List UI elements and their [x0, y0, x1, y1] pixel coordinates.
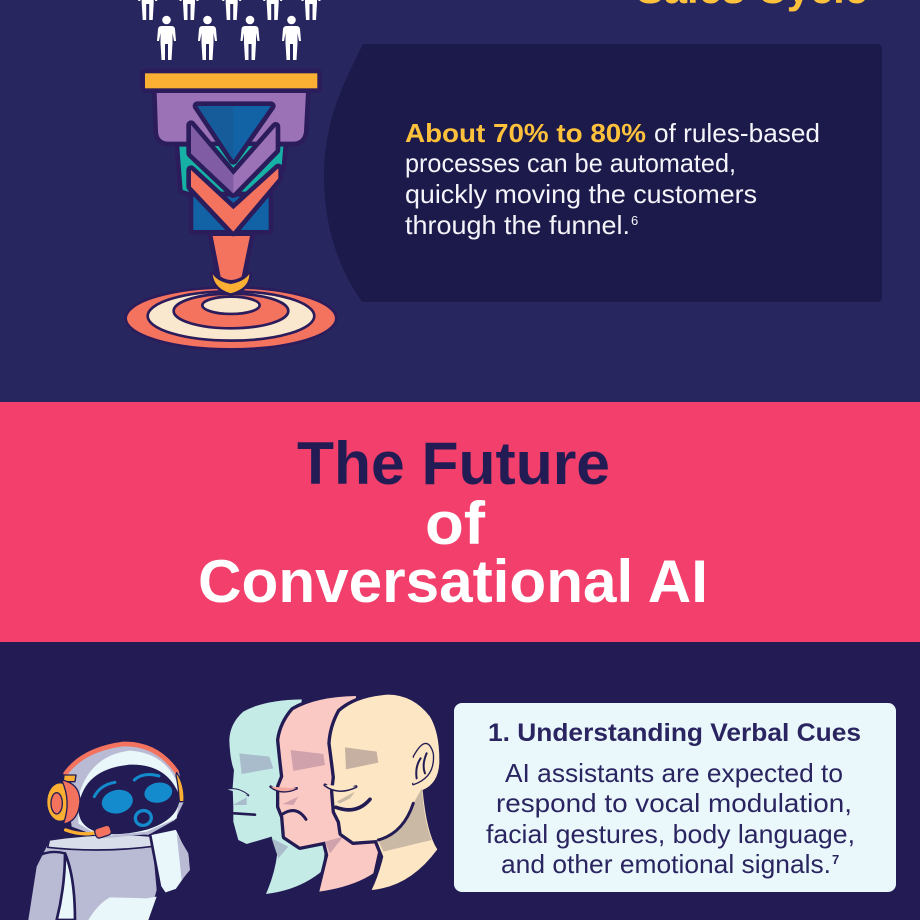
robot chest highlight: [88, 897, 157, 920]
purple chevron: [191, 125, 276, 193]
pink face: [271, 696, 380, 892]
robot collar: [48, 835, 157, 850]
card body text: facial gestures, body language,: [486, 819, 855, 849]
card: understanding verbal cues: [454, 703, 896, 892]
robot left earphone: [47, 775, 80, 824]
robot headset microphone: [66, 824, 112, 839]
section background: sales cycle: [0, 0, 920, 401]
text: automation statistic: [405, 118, 820, 240]
funnel ring: [213, 274, 249, 293]
section background: future banner: [0, 402, 920, 642]
teal inner chevron: [210, 146, 258, 171]
card body text: [486, 758, 855, 879]
left chevron shade: [191, 125, 233, 193]
text: automation statistic: processes can be automated,: [405, 148, 736, 178]
icon: funnel over target: [126, 73, 336, 349]
robot helmet: [65, 745, 184, 838]
title: The Future of Conversational AI: Conversational AI: [198, 548, 708, 615]
robot right earphone: [176, 773, 184, 802]
salmon chevron: [191, 168, 278, 232]
icon: people entering funnel: [138, 0, 320, 60]
teal face: [228, 699, 325, 894]
title: The Future of Conversational AI: The Future: [297, 430, 610, 497]
card body text: 7: [832, 852, 839, 867]
title: The Future of Conversational AI: of: [425, 490, 486, 557]
text: automation statistic: About 70% to 80%: [405, 118, 646, 148]
robot shoulder line: [37, 852, 65, 857]
robot eyebrows: [94, 775, 159, 797]
card body text: AI assistants are expected to: [505, 758, 843, 788]
funnel purple top: [157, 92, 306, 142]
text: automation statistic: quickly moving the customers: [405, 179, 757, 209]
cream face: [325, 695, 439, 890]
robot face: [80, 766, 178, 833]
text: automation statistic: 6: [631, 213, 638, 228]
text: automation statistic: of rules-based: [654, 118, 820, 148]
card body text: and other emotional signals.: [501, 849, 831, 879]
card body text: respond to vocal modulation,: [496, 788, 852, 818]
title: The Future of Conversational AI: [198, 430, 708, 615]
robot mouth: [134, 809, 153, 827]
funnel blue base: [193, 197, 269, 230]
funnel spout: [213, 236, 250, 280]
text: automation statistic: through the funnel.: [405, 210, 630, 240]
robot left arm: [57, 853, 75, 920]
panel: automation fact: [324, 44, 882, 302]
robot torso: [28, 833, 157, 920]
funnel rim: [145, 73, 317, 88]
section background: future items: [0, 642, 920, 920]
card heading: 1. Understanding Verbal Cues: [488, 719, 861, 747]
robot sleeve shade: [177, 833, 190, 880]
illustration: three faces: [228, 695, 439, 894]
robot eyes: [100, 780, 174, 816]
funnel teal layer: [179, 147, 283, 192]
illustration: robot astronaut: [28, 744, 191, 920]
blue triangle: [197, 106, 271, 160]
target rings: [126, 287, 336, 349]
triangle shade: [197, 106, 233, 160]
robot headband: [66, 744, 177, 773]
robot visor frame: [78, 751, 180, 837]
robot raised hand: [150, 828, 191, 894]
